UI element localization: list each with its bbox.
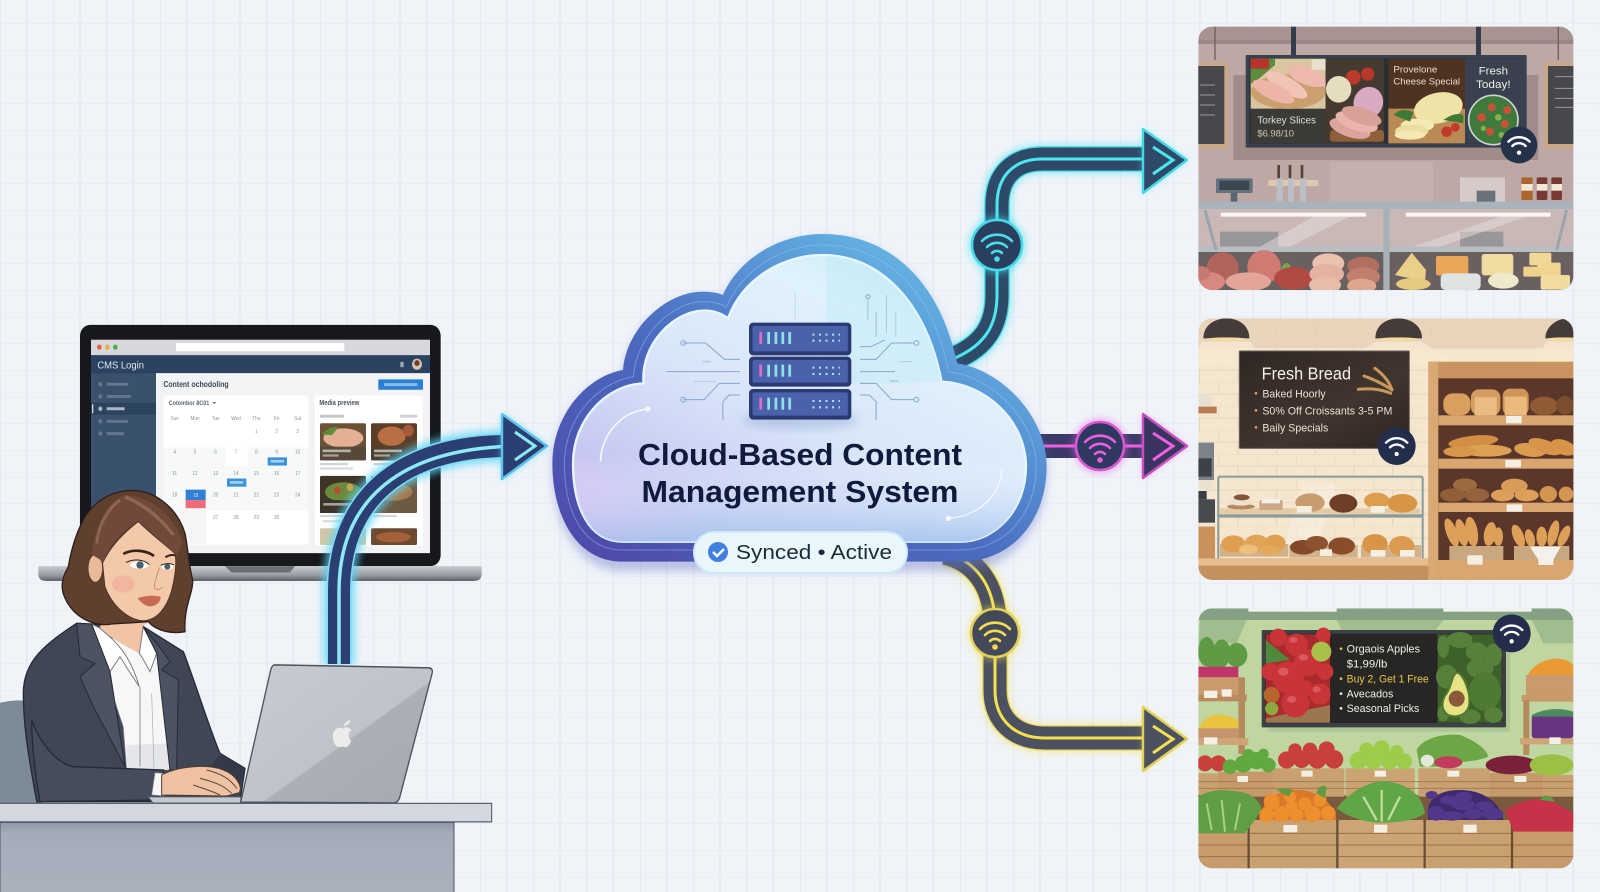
chalkboard sign (1239, 351, 1409, 448)
panel: grocery display (1197, 608, 1574, 868)
display counter (1198, 202, 1573, 290)
chalkboard sign: Baked Hoorly (1262, 388, 1326, 400)
media thumbnail: roast (371, 423, 417, 460)
shirt cuff (152, 773, 172, 796)
cloud body (573, 255, 1026, 542)
right sleeve (210, 755, 245, 787)
server unit 3 (749, 389, 851, 420)
arrow: dashboard to cloud (339, 414, 547, 664)
front row produce (1198, 781, 1573, 833)
pendant lamps (1203, 318, 1580, 341)
heading: cloud title: Management System (642, 474, 958, 509)
dashboard sidebar (91, 373, 156, 553)
calendar: 4 (173, 449, 176, 456)
calendar: Mon (190, 416, 200, 422)
counter (1198, 558, 1432, 580)
calendar: 29 (254, 515, 259, 521)
screen: offer text: Orgaois Apples (1347, 643, 1420, 655)
screen: offer text: $1,99/lb (1347, 659, 1387, 671)
calendar: 8 (255, 449, 258, 456)
status pill (694, 532, 907, 573)
calendar: 27 (213, 515, 218, 521)
calendar: Cotombor 8C01 (169, 400, 210, 407)
chalkboard right (1544, 62, 1574, 149)
dashboard nav bar (91, 355, 430, 373)
calendar: 26 (192, 515, 198, 521)
pastry case (1217, 477, 1423, 558)
calendar (164, 395, 308, 545)
hair front (92, 495, 183, 563)
sauce bottles (1521, 177, 1562, 200)
heading: cloud title (638, 437, 962, 509)
browser chrome (91, 340, 430, 355)
icon: wifi badge (1493, 614, 1531, 652)
laptop base (38, 566, 482, 581)
calendar: 30 (274, 515, 279, 521)
coffee equipment (1198, 394, 1217, 560)
scheduling header (156, 373, 430, 553)
sleeve (32, 720, 163, 802)
ear (88, 554, 103, 582)
calendar: 14 (233, 471, 239, 477)
calendar: 23 (274, 493, 279, 499)
front row crates (1198, 820, 1573, 868)
left produce rack (1198, 637, 1248, 754)
calendar: Thu (252, 416, 261, 422)
arrow: cloud to bakery display (1030, 414, 1187, 478)
shelf unit (1428, 362, 1578, 580)
screen: offer text: Seasonal Picks (1347, 703, 1419, 715)
calendar: Sat (294, 416, 302, 422)
calendar: 17 (295, 471, 300, 477)
calendar: 15 (254, 471, 259, 477)
calendar: 28 (233, 515, 239, 521)
desk (0, 803, 492, 892)
panel: bakery display (1190, 318, 1580, 580)
heading: cloud title: Cloud-Based Content (638, 437, 962, 472)
screen: turkey slices (1249, 59, 1329, 143)
foreground laptop (148, 665, 432, 803)
calendar: Sun (171, 416, 179, 422)
media preview panel (315, 395, 423, 546)
hand (162, 766, 240, 796)
media preview panel: Media preview (319, 400, 360, 407)
laptop lid (80, 325, 441, 566)
calendar: 10 (295, 449, 300, 456)
shirt (92, 624, 170, 770)
icon: apple logo (333, 720, 351, 747)
loaves row 3 (1440, 478, 1573, 502)
screen: turkey slices: $6.98/10 (1257, 128, 1294, 138)
circuit traces (666, 292, 919, 420)
neck (100, 593, 150, 653)
cheeses (1395, 253, 1570, 290)
icon: server stack (749, 323, 851, 420)
calendar: 20 (213, 493, 218, 499)
server unit 2 (749, 357, 851, 387)
screen: avocados (1436, 632, 1503, 724)
chalkboard sign: S0% Off Croissants 3-5 PM (1262, 405, 1392, 417)
server unit 1 (749, 323, 851, 355)
icon: wheat (1358, 368, 1392, 393)
woman at desk with laptop (0, 490, 492, 892)
calendar: 22 (254, 493, 259, 499)
calendar: 13 (213, 471, 218, 477)
dashboard nav bar: CMS Login (97, 360, 144, 371)
scheduling header: Content ochodoling (163, 380, 229, 389)
screen: provolone special: Provelone (1393, 65, 1437, 75)
digital display (1261, 628, 1506, 727)
screen: sliced ham (1326, 59, 1388, 143)
right produce rack (1520, 659, 1573, 755)
lapels (77, 623, 125, 767)
calendar: 2 (275, 429, 278, 435)
screen: provolone special: Cheese Special (1393, 76, 1460, 86)
calendar: 16 (274, 471, 279, 477)
calendar: 1 (255, 429, 258, 435)
knife rack (1268, 165, 1318, 202)
calendar: 19 (193, 493, 198, 499)
icon: wifi node magenta (1073, 419, 1127, 473)
back row crates (1197, 735, 1574, 822)
arrow: cloud to deli display (955, 129, 1187, 358)
facial features (123, 551, 175, 606)
screen: fresh today: Fresh (1479, 65, 1508, 77)
screen: provolone special (1388, 59, 1466, 143)
digital display (1246, 55, 1527, 148)
cloud outline (552, 234, 1047, 562)
screen: apples (1261, 628, 1333, 723)
laptop screen with CMS dashboard (38, 325, 482, 581)
calendar: 5 (194, 449, 197, 456)
pastries top shelf (1227, 493, 1417, 513)
blazer (23, 623, 245, 802)
calendar: 3 (296, 429, 299, 435)
calendar: 11 (172, 471, 177, 477)
deli meats (1198, 250, 1380, 290)
calendar: Wed (231, 416, 241, 422)
icon: wifi badge (1378, 427, 1416, 465)
chalkboard sign: Baily Specials (1262, 422, 1328, 434)
calendar: 21 (233, 493, 239, 499)
screen: offer text: Buy 2, Get 1 Free (1347, 673, 1429, 685)
screen: fresh today (1465, 59, 1523, 145)
media thumbnail: deli (320, 423, 366, 460)
calendar: 9 (275, 449, 278, 456)
pastries bottom shelf (1220, 534, 1421, 558)
calendar: Fri (274, 416, 279, 422)
screen: turkey slices: Torkey Slices (1257, 116, 1316, 127)
loaves row 1 (1443, 389, 1574, 415)
face (103, 522, 176, 621)
icon: wifi node cyan (969, 217, 1025, 273)
calendar: 12 (192, 471, 198, 477)
calendar: 7 (235, 449, 238, 456)
deli scale (1216, 178, 1253, 202)
icon: wifi node yellow (968, 606, 1022, 660)
media thumbnail: bread (371, 476, 417, 513)
panel: deli display (1190, 27, 1577, 294)
screen: offer text: Avecados (1347, 688, 1393, 700)
hair (62, 490, 193, 632)
icon: wifi badge (1501, 127, 1537, 163)
cloud: content management system (552, 234, 1047, 573)
chalkboard sign: Fresh Bread (1262, 363, 1351, 383)
calendar: 24 (295, 493, 300, 499)
screen: offer text (1340, 643, 1429, 715)
loaves row 2 (1443, 435, 1574, 457)
baguette baskets (1442, 516, 1573, 565)
media thumbnail: salad (320, 476, 366, 513)
chalkboard left (1195, 63, 1228, 149)
calendar: 6 (214, 449, 217, 456)
status pill: Synced • Active (736, 542, 892, 564)
woman (23, 490, 245, 802)
screen: fresh today: Today! (1476, 79, 1511, 91)
arrow: cloud to grocery display (945, 553, 1187, 771)
calendar: Tue (212, 416, 220, 422)
office chair (0, 700, 42, 803)
calendar: 18 (172, 493, 177, 499)
